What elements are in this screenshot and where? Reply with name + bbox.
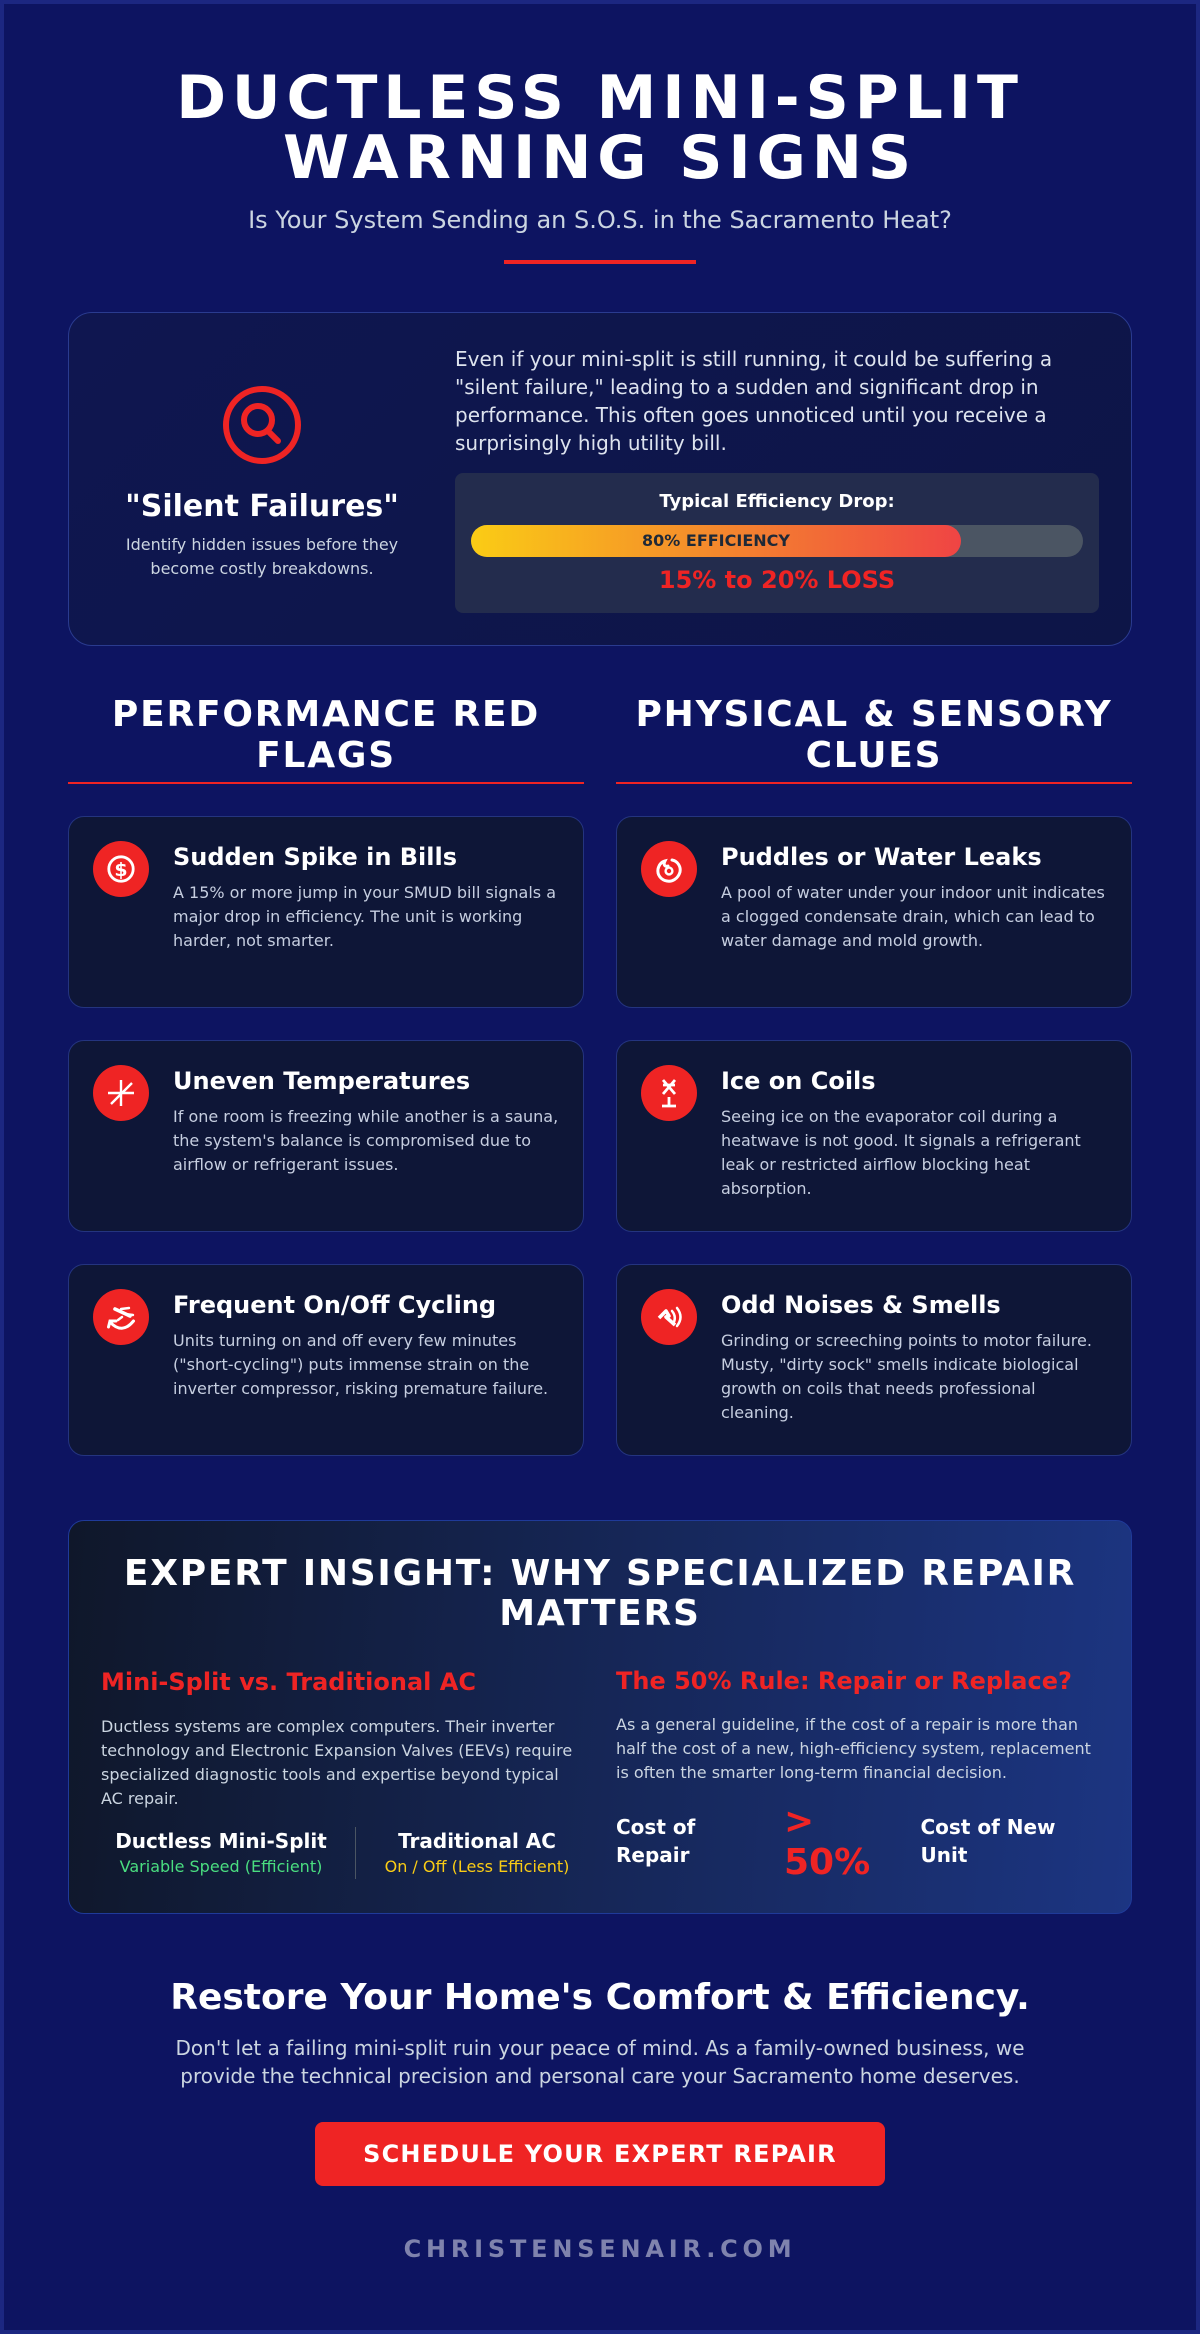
button: schedule repair: SCHEDULE YOUR EXPERT REPAIR: [363, 2140, 837, 2168]
panel: expert insight: [68, 1520, 1132, 1914]
card: odd noises: [616, 1264, 1132, 1456]
icon: dollar: [93, 841, 149, 897]
text: mini-split explanation: Ductless systems are complex computers. Their inverter: [101, 1717, 554, 1736]
card text: Musty, "dirty sock" smells indicate biological: [721, 1355, 1079, 1374]
title: WARNING SIGNS: [283, 123, 917, 193]
text: 50% rule explanation: is often the smarter long-term financial decision.: [616, 1763, 1007, 1782]
card title: Frequent On/Off Cycling: [173, 1290, 496, 1318]
text: mini-split explanation: technology and Electronic Expansion Valves (EEVs) require: [101, 1741, 572, 1760]
call to action text: provide the technical precision and personal care your Sacramento home deserves.: [180, 2064, 1020, 2088]
chart: efficiency drop: [455, 473, 1099, 613]
bar track: [471, 525, 1083, 557]
panel: silent failures: [68, 312, 1132, 646]
panel heading: MATTERS: [499, 1593, 701, 1634]
card: ice on coils: [616, 1040, 1132, 1232]
card text: a clogged condensate drain, which can lead to: [721, 907, 1095, 926]
icon: sound waves: [641, 1289, 697, 1345]
card text: inverter compressor, risking premature failure.: [173, 1379, 548, 1398]
card text: Units turning on and off every few minutes: [173, 1331, 516, 1350]
card title: Odd Noises & Smells: [721, 1290, 1001, 1318]
text: intro paragraph: Even if your mini-split is still running, it could be suffering a: [455, 347, 1052, 371]
panel heading: EXPERT INSIGHT: WHY SPECIALIZED REPAIR: [124, 1553, 1076, 1594]
heading: performance red flags: [112, 694, 540, 776]
equation: cost of new unit: Cost of New: [920, 1815, 1056, 1839]
text: mini-split explanation: [101, 1717, 572, 1808]
comparison: traditional ac: On / Off (Less Efficient): [385, 1857, 569, 1876]
card text: If one room is freezing while another is a sauna,: [173, 1107, 558, 1126]
text: 50% rule explanation: As a general guideline, if the cost of a repair is more than: [616, 1715, 1078, 1734]
text: silent failures tagline: Identify hidden issues before they: [126, 535, 398, 554]
icon: snow star: [93, 1065, 149, 1121]
equation: greater than 50%: >: [784, 1801, 814, 1842]
icon: water swirl: [641, 841, 697, 897]
call to action text: Don't let a failing mini-split ruin your peace of mind. As a family-owned business, we: [176, 2036, 1024, 2060]
call to action heading: Restore Your Home's Comfort & Efficiency.: [170, 1977, 1030, 2018]
equation: greater than 50%: 50%: [784, 1842, 870, 1883]
comparison: ductless mini-split: Variable Speed (Efficient): [120, 1857, 322, 1876]
icon: ice: [641, 1065, 697, 1121]
loss figure: 15% to 20% LOSS: [659, 566, 895, 594]
card text: absorption.: [721, 1179, 812, 1198]
card: uneven temperatures: [68, 1040, 584, 1232]
icon: dollar: $: [114, 859, 128, 881]
call to action text: [176, 2036, 1024, 2088]
card text: leak or restricted airflow blocking heat: [721, 1155, 1030, 1174]
text: silent failures tagline: become costly breakdowns.: [150, 559, 374, 578]
title: DUCTLESS MINI-SPLIT: [176, 63, 1024, 133]
card text: growth on coils that needs professional: [721, 1379, 1036, 1398]
text: silent failures tagline: [126, 535, 398, 578]
subtitle: Is Your System Sending an S.O.S. in the Sacramento Heat?: [248, 206, 952, 234]
heading: performance red flags: PERFORMANCE RED: [112, 694, 540, 735]
button: schedule repair: [315, 2122, 885, 2186]
equation: cost of new unit: Unit: [920, 1843, 967, 1867]
comparison: ductless mini-split: Ductless Mini-Split: [115, 1829, 327, 1853]
card: puddles: [616, 816, 1132, 1008]
card text: [173, 883, 556, 950]
subheading: 50% rule: The 50% Rule: Repair or Replace?: [616, 1667, 1072, 1695]
bar fill: 80% efficiency: 80% EFFICIENCY: [642, 531, 790, 550]
card text: [721, 1107, 1081, 1198]
card title: Uneven Temperatures: [173, 1066, 470, 1094]
heading: physical and sensory clues: CLUES: [806, 735, 942, 776]
title accent bar: [504, 260, 696, 264]
text: mini-split explanation: specialized diagnostic tools and expertise beyond typical: [101, 1765, 559, 1784]
text: intro paragraph: "silent failure," leading to a sudden and significant drop in: [455, 375, 1039, 399]
comparison: traditional ac: [385, 1829, 569, 1876]
text: intro paragraph: [455, 347, 1052, 455]
card text: airflow or refrigerant issues.: [173, 1155, 398, 1174]
card text: ("short-cycling") puts immense strain on the: [173, 1355, 529, 1374]
comparison: ductless mini-split: [115, 1829, 327, 1876]
equation: cost of repair: Cost of: [616, 1815, 695, 1839]
heading: silent failures: "Silent Failures": [125, 489, 399, 524]
heading: physical and sensory clues: PHYSICAL & SENSORY: [636, 694, 1112, 735]
bar fill: 80% efficiency: [471, 525, 961, 557]
heading rule: [68, 782, 584, 784]
heading: performance red flags: FLAGS: [256, 735, 396, 776]
card text: water damage and mold growth.: [721, 931, 983, 950]
card: sudden spike in bills: [68, 816, 584, 1008]
heading: physical and sensory clues: [636, 694, 1112, 776]
card text: cleaning.: [721, 1403, 794, 1422]
card title: Ice on Coils: [721, 1066, 876, 1094]
text: intro paragraph: performance. This often goes unnoticed until you receive a: [455, 403, 1047, 427]
icon: magnifier in circle: [223, 386, 301, 464]
heading rule: [616, 782, 1132, 784]
chart title: Typical Efficiency Drop:: [659, 491, 895, 512]
card title: Sudden Spike in Bills: [173, 842, 457, 870]
equation: cost of repair: Repair: [616, 1843, 690, 1867]
footer url: CHRISTENSENAIR.COM: [404, 2235, 796, 2263]
icon: cycling arrow: [93, 1289, 149, 1345]
card text: harder, not smarter.: [173, 931, 334, 950]
card text: major drop in efficiency. The unit is working: [173, 907, 522, 926]
card text: [721, 1331, 1092, 1422]
subheading: mini-split vs traditional: Mini-Split vs. Traditional AC: [101, 1668, 476, 1696]
card text: Seeing ice on the evaporator coil during a: [721, 1107, 1057, 1126]
card text: heatwave is not good. It signals a refrigerant: [721, 1131, 1081, 1150]
comparison: traditional ac: Traditional AC: [398, 1829, 556, 1853]
equation: greater than 50%: [784, 1801, 870, 1883]
card: frequent cycling: [68, 1264, 584, 1456]
card text: Grinding or screeching points to motor failure.: [721, 1331, 1092, 1350]
card text: [721, 883, 1105, 950]
title: [176, 63, 1024, 193]
text: mini-split explanation: AC repair.: [101, 1789, 179, 1808]
card text: [173, 1331, 548, 1398]
panel heading: [124, 1553, 1076, 1634]
card text: [173, 1107, 558, 1174]
comparison divider: [355, 1827, 356, 1879]
card title: Puddles or Water Leaks: [721, 842, 1042, 870]
card text: the system's balance is compromised due to: [173, 1131, 531, 1150]
card text: A 15% or more jump in your SMUD bill signals a: [173, 883, 556, 902]
equation: cost of new unit: [920, 1815, 1056, 1867]
card text: A pool of water under your indoor unit indicates: [721, 883, 1105, 902]
text: 50% rule explanation: [616, 1715, 1091, 1782]
text: intro paragraph: surprisingly high utility bill.: [455, 431, 727, 455]
equation: cost of repair: [616, 1815, 696, 1867]
text: 50% rule explanation: half the cost of a new, high-efficiency system, replacement: [616, 1739, 1091, 1758]
